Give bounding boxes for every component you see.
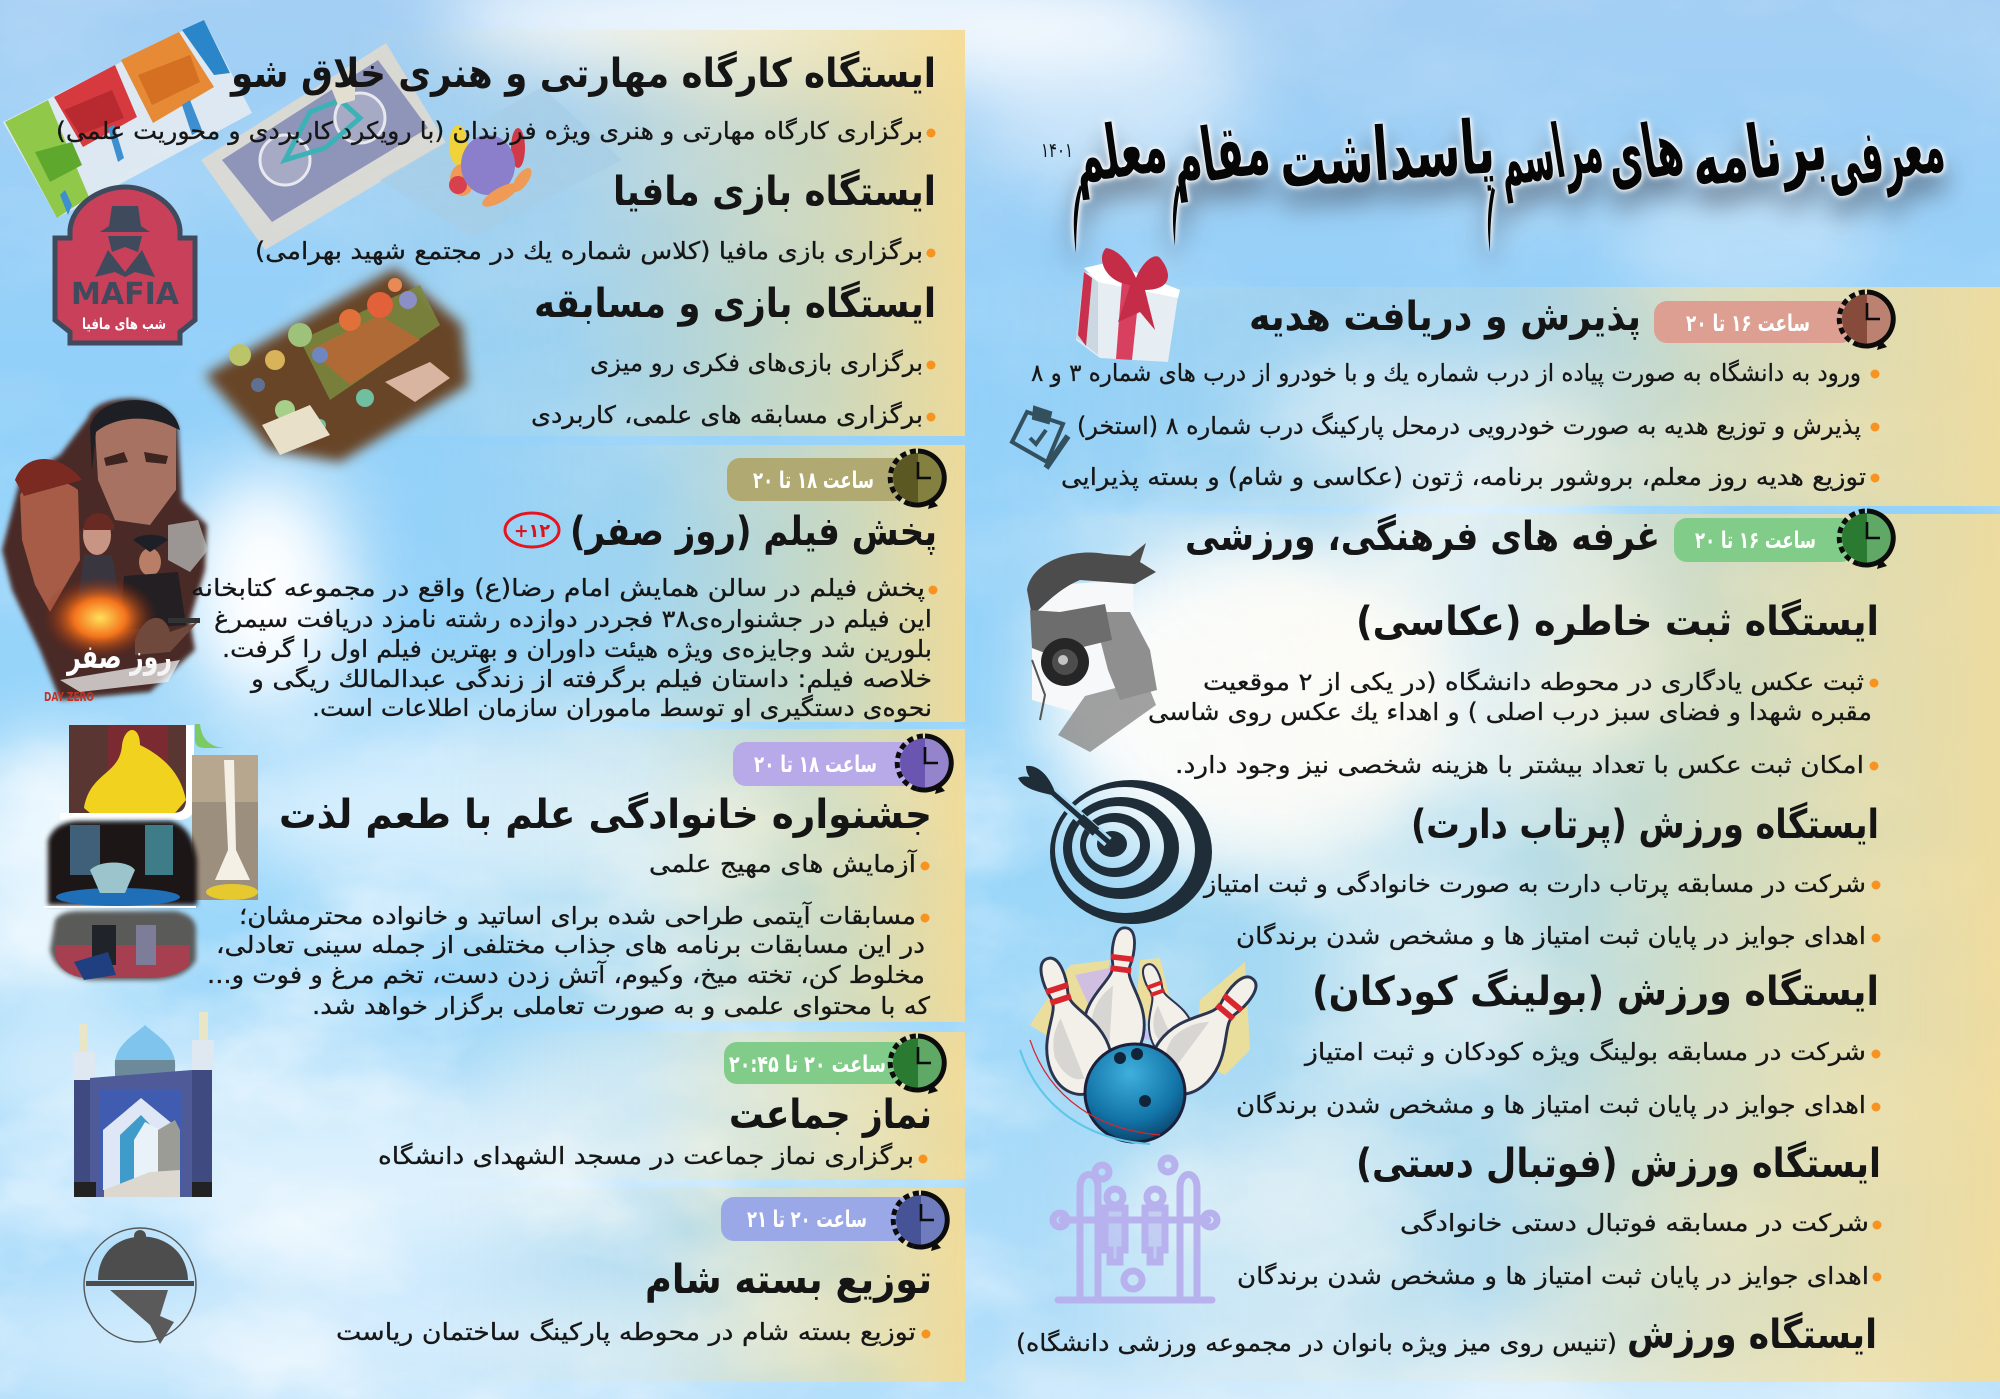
- image: string-art bicycle: [201, 43, 446, 250]
- film description: بلورین شد وجایزه‌ی ویژه هیئت داوران و بهترین فیلم اول را گرفت.: [222, 635, 932, 663]
- item: contests: [207, 901, 931, 1020]
- item: prayer: برگزاری نماز جماعت در مسجد الشهدای دانشگاه: [378, 1142, 914, 1170]
- image: mafia badge: [55, 187, 195, 343]
- icon: clipboard: [1012, 408, 1068, 468]
- list: games: برگزاری بازی‌های فکری رو میزی: [590, 349, 923, 377]
- list: reception: توزیع هدیه روز معلم، بروشور برنامه، ژتون (عکاسی و شام) و بسته پذیرایی: [1061, 463, 1866, 491]
- title: های: [1601, 105, 1689, 202]
- list: reception: ورود به دانشگاه به صورت پیاده از درب شماره یك و با خودرو از درب های شماره ۳ و ۸: [1031, 359, 1861, 387]
- title: برنامه: [1686, 101, 1832, 205]
- list: reception: پذیرش و توزیع هدیه به صورت خودرویی درمحل پارکینگ درب شماره ۸ (استخر): [1077, 412, 1861, 440]
- panel: film screening: [2, 398, 965, 722]
- film description: پخش فیلم در سالن همایش امام رضا(ع) واقع در مجموعه کتابخانه: [191, 574, 925, 602]
- age rating: +۱۲: [514, 520, 550, 542]
- item: workshop: برگزاری کارگاه مهارتی و هنری ویژه فرزندان (با رویکرد کاربردی و محوریت علمی): [56, 117, 923, 145]
- icon: table football: [1053, 1158, 1217, 1300]
- panel: dinner distribution: [84, 1188, 965, 1382]
- time badge: [1674, 511, 1893, 569]
- icon: bowling: [1017, 924, 1277, 1144]
- time badge: [724, 1036, 944, 1094]
- panel: reception and gift: [966, 248, 2000, 506]
- film description: این فیلم در جشنواره‌ی۳۸ فجردر دوازده رشته نامزد دریافت سیمرغ: [214, 605, 932, 633]
- time badge: ساعت ۱۶ تا ۲۰: [1686, 311, 1810, 337]
- station: photo: ایستگاه ثبت خاطره (عکاسی): [1356, 598, 1879, 645]
- title: پاسداشت: [1277, 104, 1497, 205]
- heading: dinner: توزیع بسته شام: [645, 1257, 932, 1303]
- station: bowling: ایستگاه ورزش (بولینگ کودکان): [1312, 968, 1879, 1015]
- panel: family science festival: [44, 724, 965, 1022]
- time badge: [733, 736, 951, 794]
- image: film poster: [2, 398, 208, 704]
- list: games: برگزاری مسابقه های علمی، کاربردی: [531, 401, 923, 429]
- image: mosque: [73, 1012, 214, 1197]
- list: reception: [1031, 359, 1880, 491]
- station: table tennis: [1016, 1311, 1877, 1358]
- station: bowling: [1236, 968, 1880, 1119]
- time badge: ساعت ۲۰ تا ۲۱: [747, 1207, 867, 1233]
- icon: photographer sketch: [1027, 543, 1157, 752]
- station: photo: امکان ثبت عکس با تعداد بیشتر با هزینه شخصی نیز وجود دارد.: [1175, 751, 1864, 779]
- station: table football: [1237, 1140, 1882, 1290]
- item: dinner: توزیع بسته شام در محوطه پارکینگ ساختمان ریاست: [336, 1318, 916, 1346]
- list: games: [531, 349, 936, 429]
- image: film poster: DAY ZERO: [44, 690, 94, 704]
- time badge: ساعت ۲۰ تا ۲۰:۴۵: [729, 1052, 886, 1078]
- image: mafia badge: شب های مافیا: [82, 315, 166, 333]
- age rating: [505, 513, 559, 547]
- title: مقام: [1166, 105, 1275, 203]
- panel: cultural and sports booths: [966, 511, 2000, 1382]
- image: science show photos: [44, 724, 258, 980]
- item: contests: در این مسابقات برنامه های جذاب مختلفی از جمله سینی تعادلی،: [216, 931, 925, 959]
- heading: پذیرش و دریافت هدیه: [1249, 294, 1641, 340]
- image: mafia badge: MAFIA: [71, 277, 180, 312]
- title: معلم: [1068, 103, 1172, 201]
- title: مراسم: [1493, 103, 1608, 204]
- station: table tennis: (تنیس روی میز ویژه بانوان در مجموعه ورزشی دانشگاه): [1016, 1329, 1617, 1357]
- item: contests: که با محتوای علمی و به صورت تعاملی برگزار خواهد شد.: [312, 992, 931, 1020]
- image: paint rollers: [3, 20, 252, 218]
- station: darts: [1203, 801, 1880, 950]
- image: board game: [205, 268, 468, 462]
- station: bowling: اهدای جوایز در پایان ثبت امتیاز ها و مشخص شدن برندگان: [1236, 1091, 1866, 1119]
- time badge: [1654, 292, 1893, 350]
- year label: ۱۴۰۱: [1041, 138, 1073, 162]
- heading: غرفه های فرهنگی، ورزشی: [1185, 513, 1660, 560]
- icon: serving cloche: [84, 1228, 196, 1344]
- heading: games: ایستگاه بازی و مسابقه: [534, 280, 936, 327]
- time badge: [721, 1193, 947, 1251]
- image: clay bird: [380, 87, 622, 237]
- heading: prayer: نماز جماعت: [729, 1092, 932, 1138]
- icon: gift box: [1076, 248, 1180, 362]
- station: table football: ایستگاه ورزش (فوتبال دستی): [1356, 1140, 1881, 1187]
- film description: [191, 574, 938, 722]
- icon: dartboard: [1018, 766, 1212, 924]
- panel: workshop, mafia and games: [3, 20, 965, 462]
- film description: خلاصه فیلم: داستان فیلم برگرفته از زندگی عبدالمالك ریگی و: [250, 665, 932, 693]
- item: mafia: برگزاری بازی مافیا (کلاس شماره یك در مجتمع شهید بهرامی): [255, 237, 923, 265]
- time badge: ساعت ۱۸ تا ۲۰: [753, 468, 874, 494]
- station: table football: اهدای جوایز در پایان ثبت امتیاز ها و مشخص شدن برندگان: [1237, 1262, 1869, 1290]
- film description: نحوه‌ی دستگیری او توسط ماموران سازمان اطلاعات است.: [312, 694, 932, 722]
- heading: workshop: ایستگاه کارگاه مهارتی و هنری خلاق شو: [229, 50, 936, 97]
- station: darts: اهدای جوایز در پایان ثبت امتیاز ها و مشخص شدن برندگان: [1236, 922, 1866, 950]
- station: photo: ثبت عکس یادگاری در محوطه دانشگاه (در یکی از ۲ موقعیت: [1203, 668, 1864, 696]
- heading: film: پخش فیلم (روز صفر): [570, 509, 937, 555]
- station: darts: ایستگاه ورزش (پرتاب دارت): [1411, 801, 1879, 848]
- station: table football: شرکت در مسابقه فوتبال دستی خانوادگی: [1400, 1209, 1869, 1237]
- time badge: ساعت ۱۶ تا ۲۰: [1695, 528, 1816, 554]
- image: film poster: روز صفر: [66, 637, 172, 677]
- time badge: [727, 451, 944, 509]
- station: bowling: شرکت در مسابقه بولینگ ویژه کودکان و ثبت امتیاز: [1304, 1038, 1866, 1066]
- title: [1068, 101, 1950, 253]
- item: contests: مخلوط کن، تخته میخ، وکیوم، آتش زدن دست، تخم مرغ و فوت و...: [207, 960, 925, 989]
- heading: mafia: ایستگاه بازی مافیا: [613, 168, 936, 215]
- station: photo: مقبره شهدا و فضای سبز درب اصلی ) و اهداء یك عکس روی شاسی: [1148, 698, 1872, 726]
- item: contests: مسابقات آیتمی طراحی شده برای اساتید و خانواده محترمشان؛: [239, 901, 916, 930]
- item: experiments: آزمایش های مهیج علمی: [649, 849, 917, 878]
- station: photo: [1148, 598, 1879, 779]
- station: darts: شرکت در مسابقه پرتاب دارت به صورت خانوادگی و ثبت امتیاز: [1203, 870, 1866, 898]
- time badge: ساعت ۱۸ تا ۲۰: [754, 752, 877, 778]
- station: table tennis: ایستگاه ورزش: [1627, 1311, 1877, 1358]
- panel: congregational prayer: [73, 1012, 965, 1197]
- heading: festival: جشنواره خانوادگی علم با طعم لذت: [279, 791, 932, 838]
